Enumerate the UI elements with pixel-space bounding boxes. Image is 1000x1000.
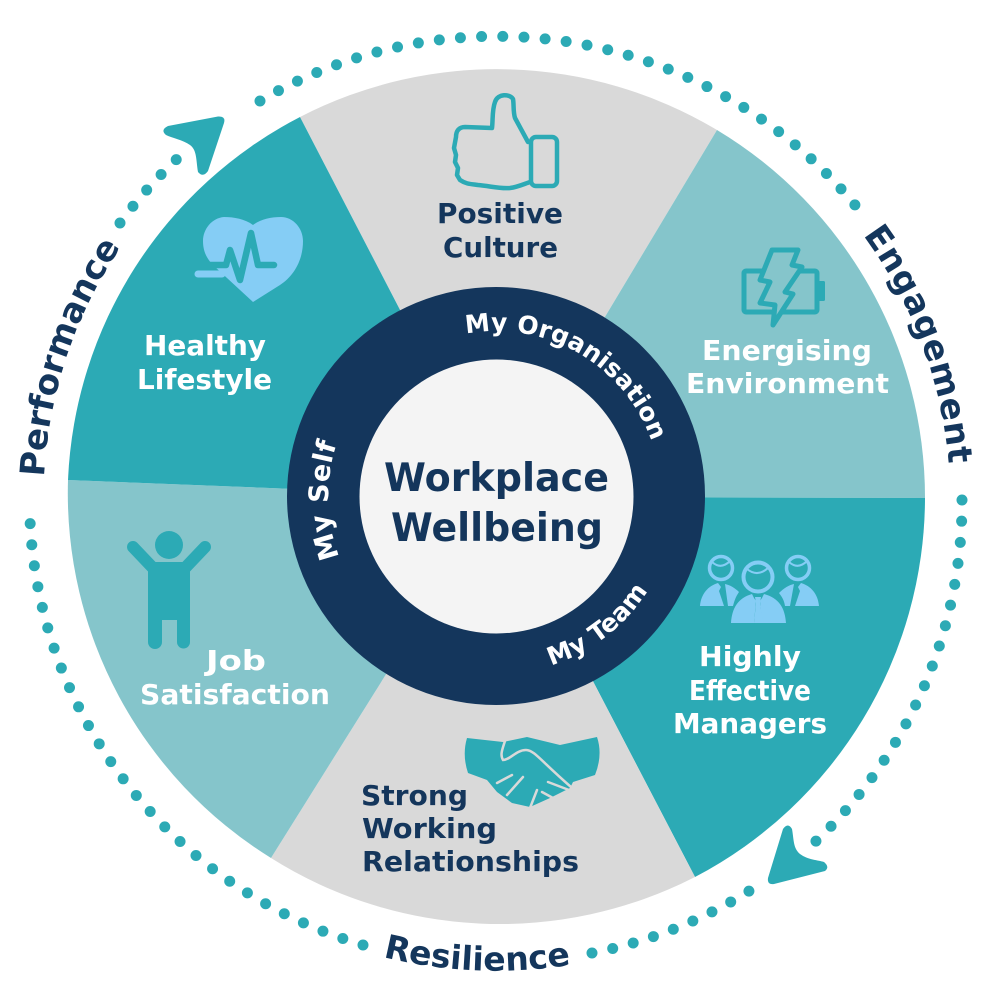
- arrow: top left: [163, 116, 224, 175]
- label: strong working relationships: [361, 780, 579, 878]
- icon: person with raised arms: [133, 531, 205, 649]
- dark ring: [287, 287, 705, 705]
- label: strong working relationships: Relationships: [362, 846, 579, 878]
- icon: thumbs up: [454, 95, 557, 188]
- icon: three managers: [700, 556, 819, 623]
- centre title: [384, 456, 609, 551]
- segment: highly effective managers: [497, 497, 925, 877]
- segment: energising environment: [497, 130, 925, 498]
- label: energising environment: Energising: [702, 335, 872, 367]
- label: job satisfaction: Satisfaction: [140, 679, 330, 711]
- ring label: my team: My Team: [546, 586, 647, 665]
- label: job satisfaction: [140, 645, 330, 711]
- label: positive culture: Culture: [443, 232, 558, 264]
- curved label: engagement: Engagement: [865, 223, 972, 463]
- centre circle: [360, 360, 634, 634]
- label: energising environment: [686, 335, 889, 400]
- panel: healthy lifestyle: [68, 117, 497, 497]
- dotted arc: bottom left: [30, 520, 363, 945]
- segment: strong working relationships: [271, 497, 695, 924]
- panel: positive culture: [300, 69, 717, 497]
- label: positive culture: Positive: [437, 198, 563, 230]
- dotted arc: right: [814, 500, 962, 842]
- panel: energising environment: [497, 130, 925, 498]
- label: strong working relationships: Strong: [361, 780, 468, 812]
- icon: heart with pulse: [198, 217, 303, 302]
- label: highly effective managers: Managers: [673, 708, 827, 740]
- icon: battery with lightning bolt: [744, 250, 825, 325]
- icon: handshake: [465, 737, 600, 808]
- curved label: resilience: Resilience: [386, 934, 568, 972]
- ring label: my self: My Self: [308, 438, 338, 560]
- panel: strong working relationships: [271, 497, 695, 924]
- arrow: bottom right: [768, 826, 827, 884]
- label: healthy lifestyle: [137, 330, 272, 396]
- dotted arc: bottom right of resilience: [592, 884, 760, 953]
- label: highly effective managers: Effective: [689, 675, 811, 707]
- label: energising environment: Environment: [686, 368, 889, 400]
- label: strong working relationships: Working: [362, 813, 497, 845]
- label: job satisfaction: Job: [204, 645, 266, 677]
- dotted arc: upper left: [120, 158, 178, 223]
- label: positive culture: [437, 198, 563, 264]
- panel: highly effective managers: [497, 497, 925, 877]
- ring label: my organisation: My Organisation: [466, 312, 663, 440]
- segment: healthy lifestyle: [68, 117, 497, 497]
- centre title: Workplace: [384, 456, 609, 501]
- dotted arc: top: [260, 36, 855, 205]
- label: healthy lifestyle: Lifestyle: [137, 364, 272, 396]
- label: highly effective managers: Highly: [699, 641, 801, 673]
- segment: job satisfaction: [68, 480, 497, 858]
- segment: positive culture: [300, 69, 717, 497]
- curved label: performance: Performance: [19, 241, 118, 474]
- label: highly effective managers: [673, 641, 827, 740]
- label: healthy lifestyle: Healthy: [144, 330, 266, 362]
- centre title: Wellbeing: [391, 506, 603, 551]
- panel: job satisfaction: [68, 480, 497, 858]
